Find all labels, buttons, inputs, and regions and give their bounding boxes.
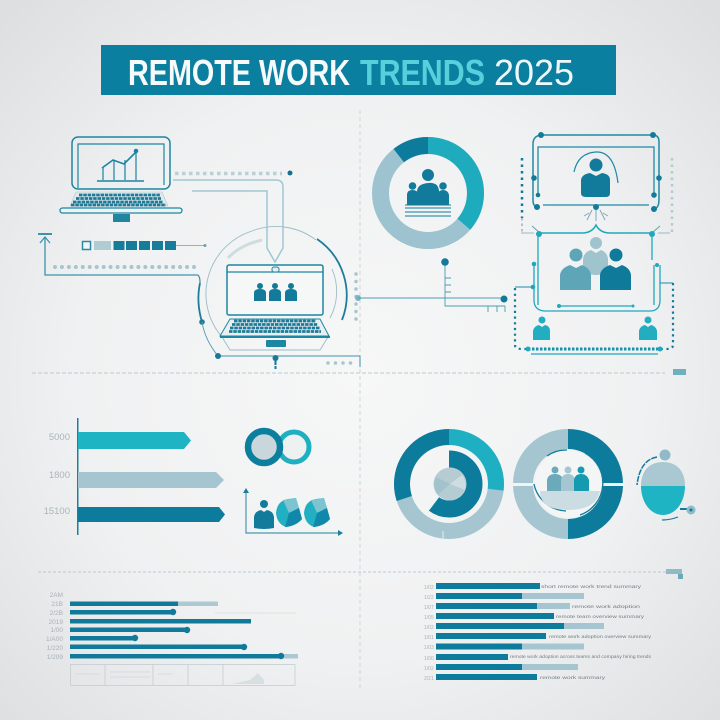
- connector lines from laptop: [173, 170, 292, 262]
- progress bars: left: 2/2B: [50, 610, 63, 617]
- progress bars: right: 1/02: [424, 585, 434, 591]
- progress bars: right: remote work adoption: [572, 604, 641, 609]
- icon: team group: [560, 237, 631, 290]
- donut chart: team split: [513, 429, 623, 539]
- icon: manager: [581, 158, 610, 197]
- icon: divider tag lower: [666, 569, 683, 579]
- network diagram: [515, 132, 673, 354]
- progress bars: left: 21B: [51, 601, 63, 608]
- progress bars: right: [424, 583, 652, 682]
- team icon on screen: [254, 283, 297, 301]
- progress bars: left: 2019: [49, 619, 63, 626]
- progress bars: right: 1/00: [424, 656, 434, 662]
- progress bars: left: 2AM: [50, 592, 63, 599]
- title banner: [101, 45, 616, 95]
- icon: antenna marker: [38, 234, 200, 283]
- progress bars: right: 1/03: [424, 645, 434, 651]
- progress bars: left: 1/A00: [46, 636, 63, 643]
- connector below laptop: [202, 322, 360, 369]
- title banner: TRENDS: [360, 52, 485, 93]
- progress bars: left: [46, 592, 298, 661]
- icon: capsule gauge: [637, 450, 696, 520]
- icon: remote person left: [533, 316, 550, 340]
- donut chart: nested: [402, 437, 496, 540]
- progress bars: right: 1/07: [424, 605, 434, 611]
- progress bars: left: 1/00: [50, 627, 63, 634]
- progress bars: right: remote work summary: [540, 675, 606, 680]
- progress bars: right: short remote work trend summary: [541, 584, 642, 589]
- progress bars: right: remote work adoption across teams and company hiring trends: [510, 654, 652, 659]
- progress bars: right: 1/01: [424, 635, 434, 641]
- step row: [82, 241, 206, 250]
- icon: team at round table: [540, 466, 600, 510]
- progress bars: right: 1/02: [424, 625, 434, 631]
- title banner: 2025: [494, 52, 574, 93]
- icon: team at table: [405, 169, 451, 216]
- arrow bar chart: [44, 418, 225, 535]
- progress bars: left: 1/220: [47, 645, 63, 652]
- arrow bar chart: 5000: [49, 432, 70, 443]
- dotted row: [55, 265, 194, 269]
- laptop with growth chart: [60, 137, 182, 222]
- icon: overlapping rings: [248, 431, 309, 463]
- icon: remote person right: [639, 316, 657, 340]
- progress bars: right: remote work adoption overview summary: [549, 634, 652, 639]
- progress bars: left: 1/209: [47, 654, 63, 661]
- chart: person and pies: [243, 488, 343, 536]
- progress bars: right: 1/05: [424, 615, 434, 621]
- central connector: [355, 258, 508, 320]
- progress bars: right: 2/21: [424, 676, 434, 682]
- data table: [70, 664, 295, 686]
- line chart icon: [97, 149, 144, 181]
- central laptop with team: [198, 226, 347, 350]
- progress bars: right: 1/22: [424, 595, 434, 601]
- title banner: REMOTE WORK: [128, 52, 350, 93]
- arrow bar chart: 15100: [44, 506, 70, 517]
- arrow bar chart: 1800: [49, 470, 70, 481]
- progress bars: right: remote team overview summary: [556, 614, 645, 619]
- donut chart: team share: [380, 146, 476, 240]
- icon: divider tag upper: [673, 369, 686, 375]
- progress bars: right: 1/02: [424, 666, 434, 672]
